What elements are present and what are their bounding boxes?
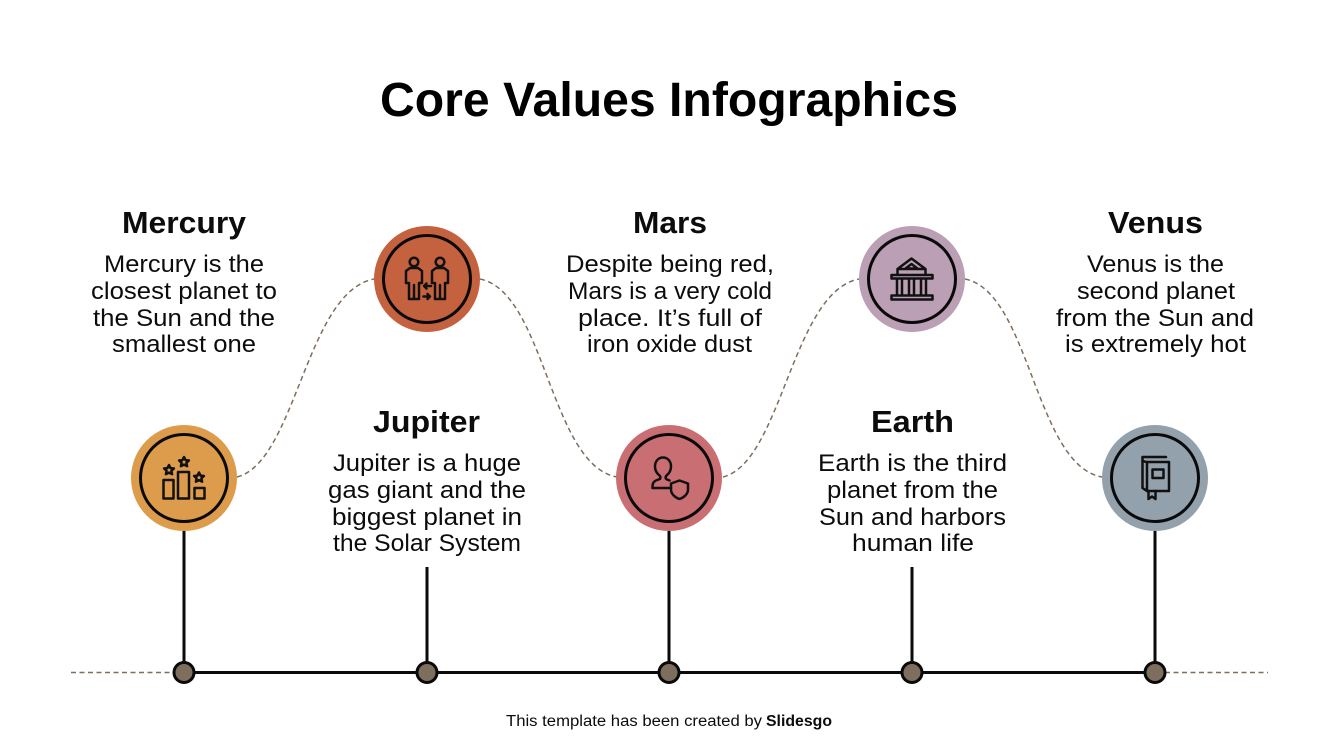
text block: Venus — [1056, 251, 1254, 358]
icon: user with shield — [616, 425, 722, 531]
text block: Venus: is extremely hot — [1065, 331, 1246, 358]
text block: Jupiter: Jupiter is a huge — [333, 450, 521, 477]
text block: Venus: second planet — [1077, 278, 1235, 305]
text block: Earth: human life — [852, 530, 974, 557]
text block: Mars: place. It’s full of — [578, 305, 762, 332]
text block: Mars: Mars is a very cold — [568, 278, 772, 305]
heading: Mercury: Mercury — [122, 205, 247, 240]
panel: Earth — [818, 226, 1007, 557]
icon: book with bookmark — [1102, 425, 1208, 531]
text block: Venus: from the Sun and — [1056, 305, 1254, 332]
text block: Jupiter: biggest planet in — [332, 504, 522, 531]
text block: Mercury: smallest one — [112, 331, 256, 358]
text block: Mercury: the Sun and the — [93, 305, 275, 332]
panel: Mercury — [91, 205, 277, 531]
text block: Earth: Earth is the third — [818, 450, 1007, 477]
heading: Mars: Mars — [633, 205, 707, 240]
text block: Earth: Sun and harbors — [819, 504, 1006, 531]
heading: Venus: Venus — [1108, 205, 1203, 240]
panel: Venus — [1056, 205, 1254, 531]
panel: Jupiter — [328, 226, 526, 557]
dashed wave connector — [237, 279, 1102, 477]
timeline — [71, 531, 1268, 682]
text block: Mars: iron oxide dust — [587, 331, 752, 358]
footer credit: This template has been created by — [506, 713, 762, 730]
text block: Mercury — [91, 251, 277, 358]
text block: Earth: planet from the — [827, 477, 998, 504]
heading: Jupiter: Jupiter — [373, 404, 480, 439]
panel: Mars — [566, 205, 774, 531]
text block: Mars: Despite being red, — [566, 251, 774, 278]
text block: Mercury: closest planet to — [91, 278, 277, 305]
heading: Earth: Earth — [871, 404, 954, 439]
footer credit: Slidesgo — [766, 713, 832, 730]
text block: Mars — [566, 251, 774, 358]
text block: Mercury: Mercury is the — [104, 251, 264, 278]
icon: podium with stars — [131, 425, 237, 531]
text block: Earth — [818, 450, 1007, 557]
icon: bank building — [859, 226, 965, 332]
text block: Jupiter — [328, 450, 526, 557]
text block: Venus: Venus is the — [1087, 251, 1224, 278]
text block: Jupiter: gas giant and the — [328, 477, 526, 504]
icon: two people exchanging — [374, 226, 480, 332]
text block: Jupiter: the Solar System — [333, 530, 521, 557]
title: Core Values Infographics — [380, 74, 958, 127]
